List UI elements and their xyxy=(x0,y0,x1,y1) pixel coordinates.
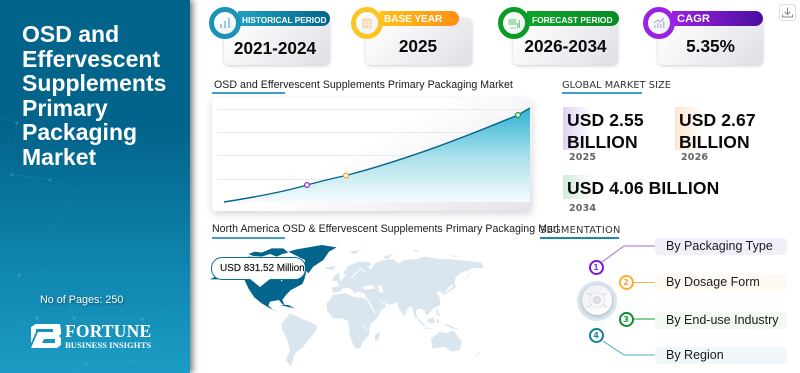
icon: segmentation hub xyxy=(577,281,617,321)
stat card: historical period xyxy=(209,7,332,68)
stat card: historical period: 2021-2024 xyxy=(234,38,316,58)
heading: segmentation: SEGMENTATION xyxy=(540,225,621,236)
callout: North America value: USD 831.52 Million xyxy=(220,262,305,274)
stat card: forecast period xyxy=(498,7,620,68)
title: Supplements xyxy=(22,70,166,96)
stat card: base year: 2025 xyxy=(399,36,437,56)
area chart panel xyxy=(212,98,532,211)
left sidebar panel xyxy=(0,0,190,373)
market value: 2025 xyxy=(563,107,644,163)
segment number 2: 2 xyxy=(623,278,629,287)
market value: 2025: BILLION xyxy=(567,132,638,152)
stat card: historical period: HISTORICAL PERIOD xyxy=(242,15,327,25)
title: Packaging xyxy=(22,119,137,145)
world map xyxy=(210,245,484,366)
market value: 2034 xyxy=(563,175,719,214)
stat card: base year: BASE YEAR xyxy=(384,14,442,25)
stat card: CAGR: CAGR xyxy=(677,13,710,25)
title: OSD and xyxy=(22,21,119,47)
segment number 3: 3 xyxy=(623,314,629,324)
stat card: CAGR: 5.35% xyxy=(686,36,735,56)
number of pages: No of Pages: 250 xyxy=(40,294,123,306)
market value: 2026 xyxy=(675,107,756,163)
segment number 3 xyxy=(618,312,634,326)
market value: 2034: USD 4.06 BILLION xyxy=(567,178,719,198)
segment label: packaging type xyxy=(655,238,787,255)
segmentation diagram connectors xyxy=(602,246,655,356)
market value: 2025: 2025 xyxy=(569,152,596,163)
stat card: CAGR xyxy=(643,7,764,68)
market value: 2034: 2034 xyxy=(569,203,596,214)
segment label: dosage form: By Dosage Form xyxy=(666,275,760,289)
title xyxy=(22,21,166,170)
segment number 1 xyxy=(588,260,604,274)
segment number 1: 1 xyxy=(593,262,599,272)
heading: global market size: GLOBAL MARKET SIZE xyxy=(562,80,671,90)
market value: 2025: USD 2.55 xyxy=(567,110,644,130)
stat card: forecast period: 2026-2034 xyxy=(524,36,607,56)
market value: 2026: 2026 xyxy=(681,152,708,163)
callout: North America value xyxy=(211,257,306,280)
icon: download button xyxy=(779,4,796,21)
market value: 2026: BILLION xyxy=(679,132,750,152)
logo: Fortune Business Insights: FORTUNE xyxy=(65,321,151,341)
title: Primary xyxy=(22,94,108,120)
heading: market chart: OSD and Effervescent Supplements Primary Packaging Market xyxy=(214,78,513,90)
segment label: packaging type: By Packaging Type xyxy=(666,239,773,253)
segment label: end-use industry: By End-use Industry xyxy=(666,313,779,327)
logo: Fortune Business Insights xyxy=(31,321,151,350)
segment number 4: 4 xyxy=(593,330,599,340)
stat card: base year xyxy=(351,7,474,68)
title: Market xyxy=(22,144,96,170)
segment label: region: By Region xyxy=(666,348,724,362)
segment number 2 xyxy=(618,275,634,290)
market value: 2026: USD 2.67 xyxy=(679,110,756,130)
logo: Fortune Business Insights: BUSINESS INSIGHTS xyxy=(65,340,151,350)
segment number 4 xyxy=(588,328,604,342)
stat card: forecast period: FORECAST PERIOD xyxy=(532,15,612,25)
segment label: dosage form xyxy=(655,274,787,291)
title: Effervescent xyxy=(22,46,160,72)
segment label: region xyxy=(655,347,787,364)
